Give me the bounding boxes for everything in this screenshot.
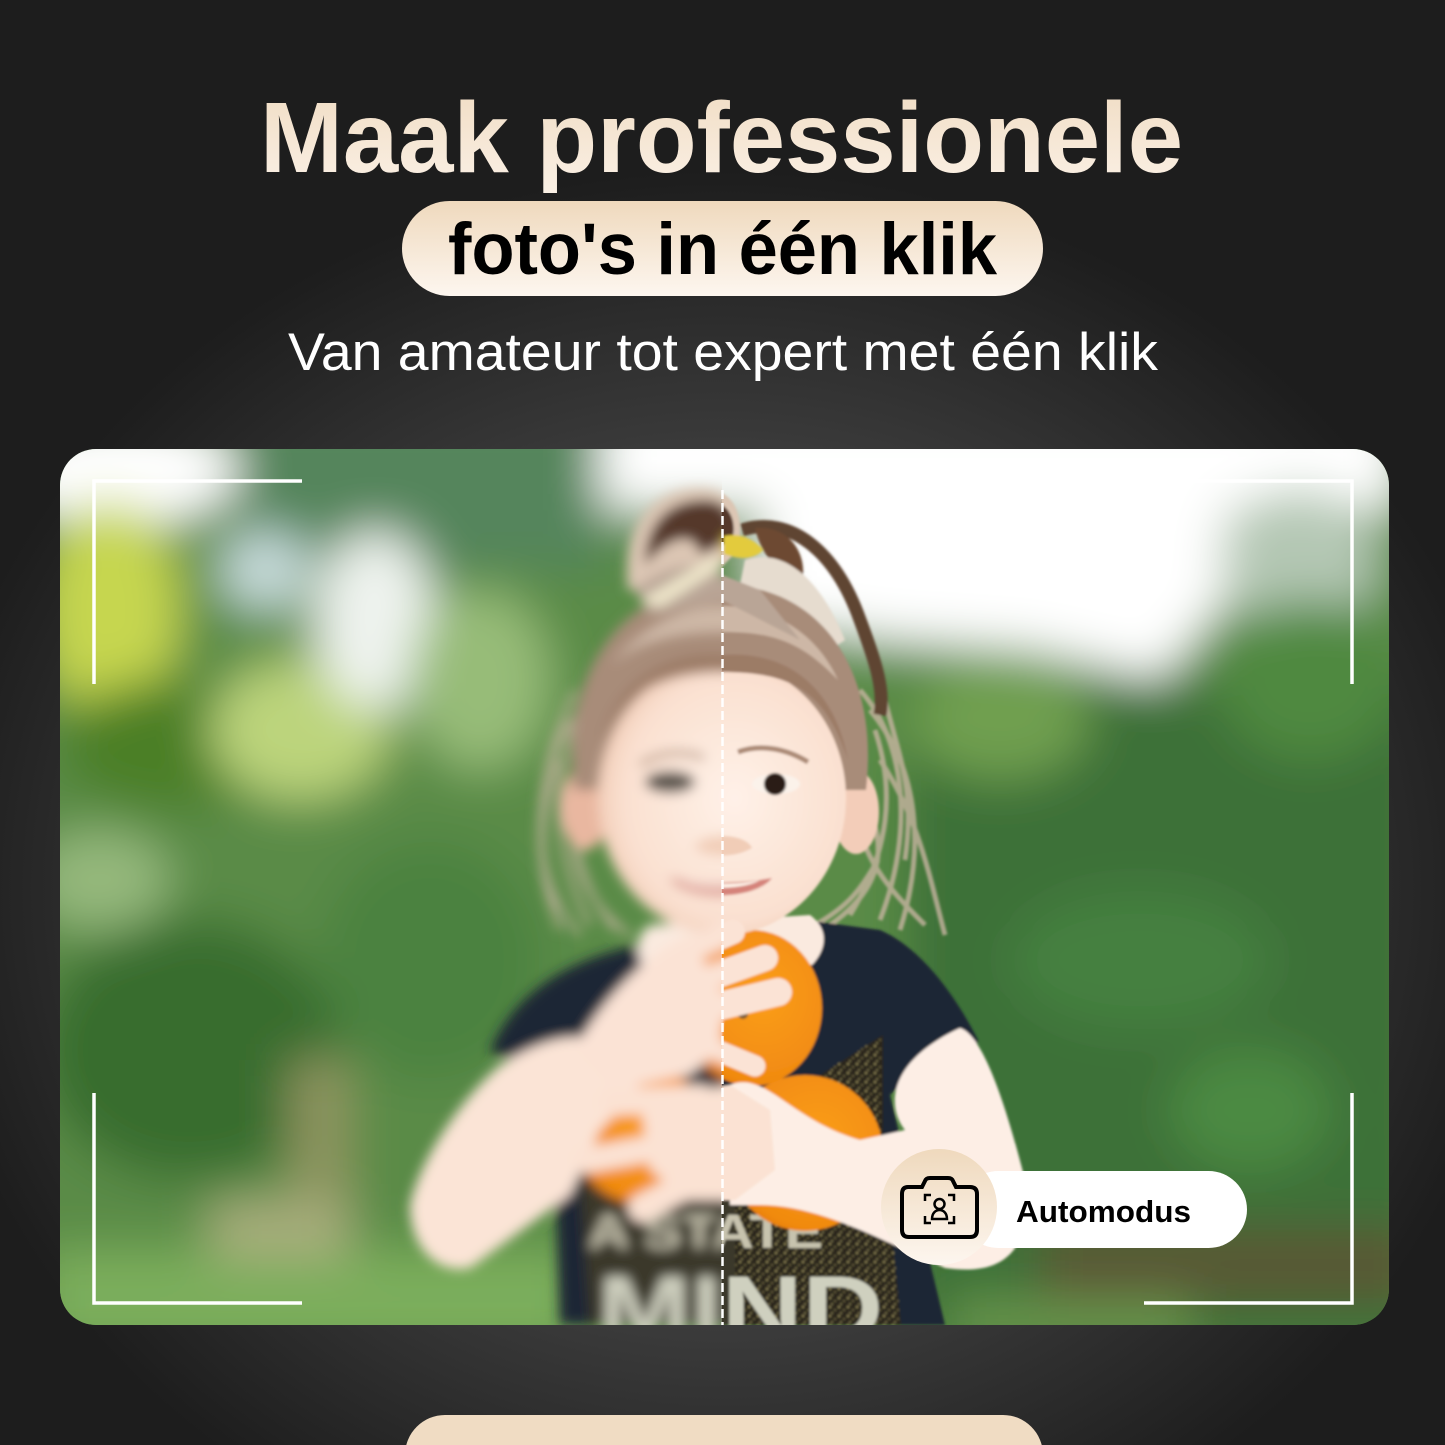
photo background foliage xyxy=(60,449,1389,1325)
bottom button cut off at edge xyxy=(405,1415,1043,1445)
viewfinder corner bottom left xyxy=(94,1093,302,1303)
badge label: Automodus xyxy=(1016,1194,1191,1229)
viewfinder corner top right xyxy=(1144,481,1352,684)
left half: blurred subject xyxy=(401,482,722,1325)
auto mode badge xyxy=(881,1149,1247,1265)
subtitle: Van amateur tot expert met één klik xyxy=(288,323,1159,382)
icon: camera with portrait focus xyxy=(902,1178,977,1237)
title: Maak professionele xyxy=(260,82,1183,194)
viewfinder corner top left xyxy=(94,481,302,684)
viewfinder corner bottom right xyxy=(1144,1093,1352,1303)
highlighted heading pill: foto's in één klik xyxy=(448,209,997,290)
before and after divider xyxy=(721,490,724,1325)
right half: sharp subject xyxy=(722,493,1025,1325)
panel: before and after photo xyxy=(60,449,1389,1325)
